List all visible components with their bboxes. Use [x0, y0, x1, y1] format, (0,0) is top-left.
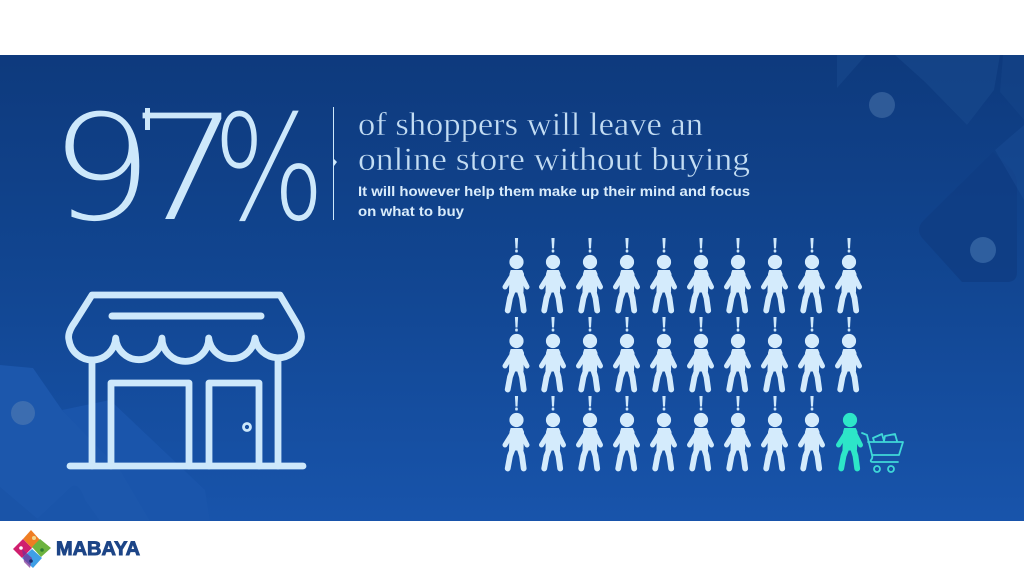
headline: of shoppers will leave an	[358, 107, 703, 143]
decorative price tags top right	[837, 55, 1024, 282]
row 1	[505, 238, 860, 310]
icon: store	[69, 295, 303, 466]
big number: 97%: %	[213, 84, 325, 254]
subheading	[358, 183, 750, 219]
subheading: It will however help them make up their mind and focus	[358, 183, 750, 199]
icon: shopping cart	[862, 433, 903, 472]
divider with pointer	[333, 107, 337, 220]
logo wordmark: MABAYA	[56, 539, 140, 560]
decorative price tags bottom left	[0, 365, 210, 521]
big number: 97%	[50, 84, 325, 254]
headline	[358, 107, 750, 178]
row 3	[505, 396, 822, 468]
big number: 97%: 9	[50, 84, 154, 254]
big number: 97%: 7	[128, 84, 241, 254]
people grid: 99 leaving shoppers	[505, 238, 860, 468]
icon: buying shopper	[838, 413, 860, 468]
logo	[13, 530, 140, 568]
row 2	[505, 317, 860, 390]
headline: online store without buying	[358, 142, 750, 178]
logo mark	[13, 530, 51, 568]
subheading: on what to buy	[358, 203, 464, 219]
